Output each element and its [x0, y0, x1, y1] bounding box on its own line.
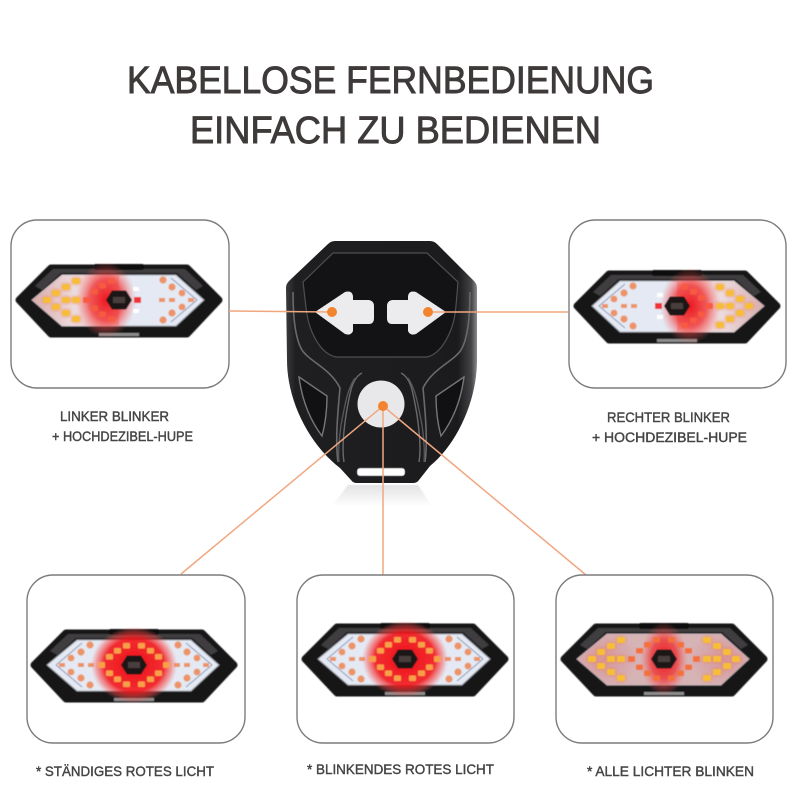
bike light: blinking red ring: [305, 621, 505, 697]
panel: all lights blinking: [556, 575, 773, 743]
round button: [358, 380, 404, 428]
title: [127, 60, 654, 152]
caption: blinking red light: * BLINKENDES ROTES LICHT: [307, 762, 494, 777]
title: KABELLOSE FERNBEDIENUNG: [127, 60, 654, 102]
caption: left turn signal: LINKER BLINKER: [60, 409, 169, 424]
caption: constant red light: * STÄNDIGES ROTES LICHT: [36, 764, 214, 779]
caption: right turn signal: RECHTER BLINKER: [607, 410, 730, 425]
left arrow button: [315, 292, 374, 335]
caption: left turn signal: + HOCHDEZIBEL-HUPE: [52, 429, 193, 444]
right arrow button: [387, 292, 446, 335]
panel: constant red light: [27, 575, 245, 743]
remote body: [286, 241, 477, 483]
title: EINFACH ZU BEDIENEN: [190, 110, 601, 152]
bike light: all lit: [564, 622, 764, 696]
panel: right turn signal: [569, 220, 786, 388]
caption: right turn signal: [592, 410, 747, 445]
bike light: red ring: [34, 627, 234, 703]
connector lines: [181, 311, 586, 575]
bike light: left arrow lit: [19, 262, 219, 338]
remote control: [286, 241, 477, 506]
caption: right turn signal: + HOCHDEZIBEL-HUPE: [592, 430, 747, 445]
caption: all lights blinking: * ALLE LICHTER BLINKEN: [587, 764, 754, 779]
caption: left turn signal: [52, 409, 193, 444]
remote reflection: [332, 485, 432, 506]
panel: blinking red light: [297, 575, 514, 743]
connector dots: [327, 307, 433, 411]
bike light: right arrow lit: [577, 268, 777, 344]
panel: left turn signal: [11, 220, 229, 388]
top window: [303, 253, 458, 357]
body ridges: [293, 292, 470, 462]
lanyard slot: [357, 468, 405, 476]
